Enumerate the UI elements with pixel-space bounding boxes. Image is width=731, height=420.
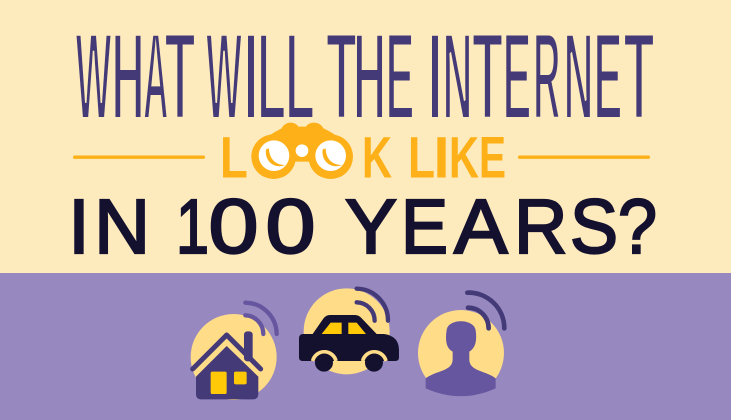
heading: in 100 years?: I <box>68 184 90 270</box>
heading: in 100 years?: E <box>401 184 448 270</box>
infographic header: T <box>624 7 654 146</box>
heading: look like: K <box>362 126 392 191</box>
title: what will the internet: W <box>206 7 242 146</box>
heading: in 100 years?: N <box>94 184 150 270</box>
icons row <box>191 288 504 400</box>
title: what will the internet: E <box>502 7 532 146</box>
heading: in 100 years?: R <box>514 184 568 270</box>
icon: house with wifi <box>191 303 277 400</box>
heading: look like: L <box>408 126 435 191</box>
panel: cream background <box>0 0 731 273</box>
title: what will the internet: T <box>326 7 357 146</box>
icon: binoculars <box>251 123 353 179</box>
title: what will the internet: I <box>243 7 259 146</box>
heading: look like: I <box>434 126 450 191</box>
heading: look like: L <box>220 126 247 191</box>
title: what will the internet: H <box>112 7 144 146</box>
title: what will the internet: R <box>533 7 560 146</box>
title: what will the internet: T <box>164 7 196 146</box>
title: what will the internet: E <box>594 7 622 146</box>
title: what will the internet: W <box>76 7 112 146</box>
heading: in 100 years?: 1 <box>176 184 209 270</box>
title: what will the internet: H <box>353 7 386 146</box>
title: what will the internet: T <box>472 7 503 146</box>
panel: purple band <box>0 273 731 420</box>
title: what will the internet: N <box>442 7 472 146</box>
heading: in 100 years?: 0 <box>208 184 258 270</box>
heading: in 100 years?: A <box>454 184 508 270</box>
heading: in 100 years?: ? <box>618 184 657 270</box>
heading: in 100 years?: S <box>570 184 618 270</box>
heading: in 100 years?: 0 <box>266 184 316 270</box>
title: what will the internet: N <box>564 7 594 146</box>
heading: look like: K <box>449 126 479 191</box>
heading: in 100 years?: Y <box>345 184 397 270</box>
title: what will the internet: L <box>257 7 286 146</box>
title: what will the internet: E <box>386 7 414 146</box>
title: what will the internet: A <box>143 7 168 146</box>
title: what will the internet: I <box>427 7 443 146</box>
icon: car with wifi <box>299 288 399 374</box>
title: what will the internet: L <box>285 7 314 146</box>
icon: person with wifi <box>418 293 504 396</box>
heading: look like: E <box>479 126 506 191</box>
